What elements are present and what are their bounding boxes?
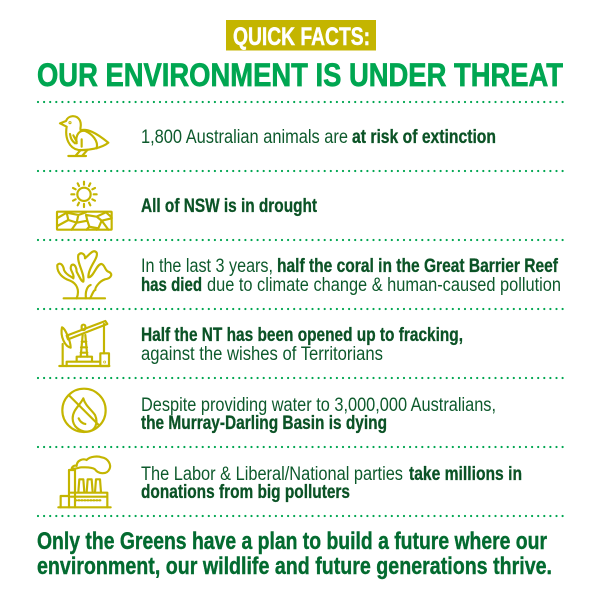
fact text: The Labor & Liberal/National parties bbox=[141, 464, 403, 485]
closing statement bbox=[37, 528, 552, 580]
fact text bbox=[141, 325, 463, 365]
icon: polluting factory bbox=[58, 457, 111, 507]
fact text: Half the NT has been opened up to fracking, bbox=[141, 325, 463, 346]
fact text: All of NSW is in drought bbox=[141, 196, 318, 217]
fact text: at risk of extinction bbox=[352, 127, 496, 148]
icon: oil pump jack bbox=[59, 321, 109, 366]
panel: coral fact bbox=[57, 251, 561, 298]
fact text: take millions in bbox=[409, 464, 522, 485]
icon: sun over cracked earth bbox=[57, 182, 112, 230]
fact text bbox=[141, 464, 522, 503]
fact text: In the last 3 years, bbox=[141, 256, 273, 277]
panel: fracking fact bbox=[59, 321, 463, 366]
icon: no water bbox=[62, 389, 106, 432]
fact text: against the wishes of Territorians bbox=[141, 344, 383, 365]
fact text bbox=[141, 395, 496, 434]
badge: quick facts: QUICK FACTS: bbox=[233, 23, 370, 51]
fact text: 1,800 Australian animals are bbox=[141, 127, 348, 148]
panel: Murray-Darling fact bbox=[62, 389, 496, 434]
icon: bird bbox=[60, 116, 108, 156]
fact text: the Murray-Darling Basin is dying bbox=[141, 413, 387, 434]
panel: drought fact bbox=[57, 182, 318, 230]
fact text bbox=[141, 256, 561, 296]
fact text: donations from big polluters bbox=[141, 482, 350, 503]
fact text: has died bbox=[141, 275, 202, 296]
fact text bbox=[141, 127, 496, 148]
panel: donations fact bbox=[58, 457, 522, 507]
panel: extinction fact bbox=[60, 116, 496, 156]
icon: coral bbox=[57, 251, 111, 298]
fact text: Despite providing water to 3,000,000 Australians, bbox=[141, 395, 496, 416]
